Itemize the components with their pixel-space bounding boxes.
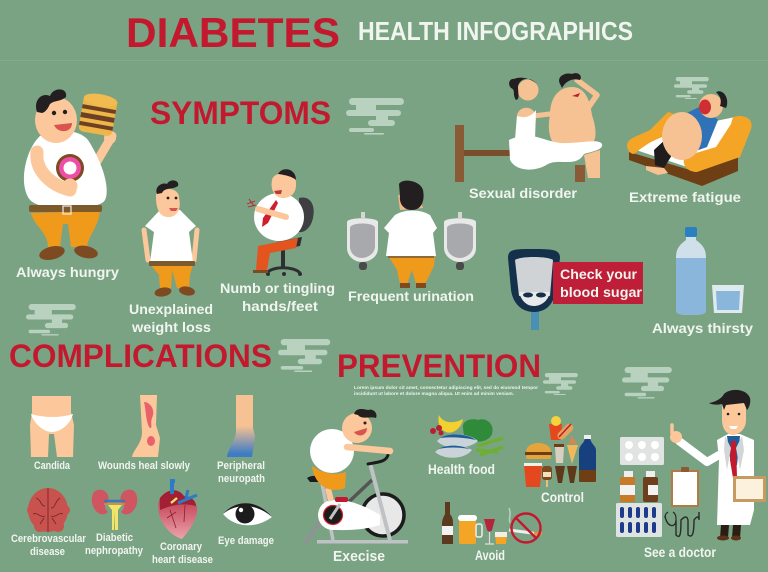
heading: symptoms: SYMPTOMS (150, 95, 331, 131)
panel: always hungry (16, 89, 119, 280)
item: coronary heart disease: Coronary (160, 541, 203, 553)
icon: water bottle and glass (676, 227, 744, 315)
title: DIABETES: DIABETES (126, 9, 340, 56)
label: numb or tingling hands/feet: hands/feet (242, 298, 318, 314)
label: always thirsty: Always thirsty (652, 320, 753, 336)
icon: fast food and drinks (524, 416, 596, 487)
label: extreme fatigue: Extreme fatigue (629, 189, 741, 205)
icon: alcohol and no smoking (442, 502, 542, 544)
label: unexplained weight loss (129, 301, 213, 335)
label: execise: Execise (333, 548, 385, 565)
panel: control (524, 416, 596, 505)
item: cerebrovascular disease (11, 488, 87, 558)
label: unexplained weight loss: Unexplained (129, 301, 213, 317)
decorative cloud: complications (278, 339, 330, 372)
callout: red box: Check your (560, 266, 638, 282)
lorem ipsum text block (354, 385, 538, 397)
item: coronary heart disease (152, 481, 213, 566)
panel: avoid (442, 502, 542, 563)
panel: always thirsty (652, 227, 753, 336)
item: eye damage (218, 503, 274, 547)
decorative cloud: doctor (622, 367, 672, 398)
icon: banana, greens, fish (430, 415, 503, 458)
icon: fat man with burger and donut (24, 89, 118, 262)
item: peripheral neuropath: Peripheral (217, 460, 265, 472)
decorative cloud: fatigue (674, 77, 709, 99)
item: cerebrovascular disease: Cerebrovascular (11, 533, 87, 545)
label: control: Control (541, 489, 584, 505)
item: eye damage: Eye damage (218, 535, 274, 547)
lorem ipsum text block: Lorem ipsum dolor sit amet, consectetur adipiscing elit, sed do eiusmod tempor (354, 385, 538, 391)
panel: see a doctor (616, 390, 766, 560)
icon: glucose meter (508, 249, 560, 330)
label: unexplained weight loss: weight loss (131, 319, 211, 335)
panel: frequent urination (347, 181, 476, 304)
label: health food: Health food (428, 461, 495, 477)
panel: health food (428, 415, 503, 477)
panel: unexplained weight loss (129, 180, 213, 335)
label: sexual disorder: Sexual disorder (469, 185, 578, 201)
lorem ipsum text block: incididunt ut labore et dolore magna aliqua. Ut enim ad minim veniam. (354, 391, 514, 397)
label: always hungry: Always hungry (16, 264, 119, 280)
icon: thin man holding loose pants (144, 180, 197, 298)
item: candida: Candida (34, 460, 71, 472)
label: avoid: Avoid (475, 547, 505, 563)
panel: sexual disorder (455, 73, 602, 201)
callout: red box: blood sugar (560, 284, 643, 300)
icon: seated man with tingling hands (247, 169, 314, 276)
item: wounds heal slowly (98, 395, 191, 472)
decorative cloud: left (26, 304, 76, 335)
decorative cloud: prevention (543, 373, 578, 395)
item: candida (30, 396, 74, 472)
label: numb or tingling hands/feet: Numb or tingling (220, 280, 335, 296)
subtitle: health infographics: HEALTH INFOGRAPHICS (358, 16, 633, 46)
item: peripheral neuropath (217, 395, 265, 485)
item: diabetic nephropathy: nephropathy (85, 545, 144, 557)
item: diabetic nephropathy: Diabetic (96, 532, 133, 544)
panel: extreme fatigue (627, 91, 752, 205)
panel: check your blood sugar (508, 249, 643, 330)
icon: couple on bed (455, 73, 602, 182)
icon: man on exercise bike (305, 409, 408, 544)
decorative cloud: symptoms (346, 98, 404, 135)
label: see a doctor: See a doctor (644, 544, 716, 560)
panel: exercise (305, 409, 408, 565)
icon: doctor with medicines (616, 390, 766, 540)
item: peripheral neuropath: neuropath (218, 473, 265, 485)
item: cerebrovascular disease: disease (30, 546, 65, 558)
label: numb or tingling hands/feet (220, 280, 335, 314)
heading: complications: COMPLICATIONS (9, 338, 272, 374)
icon: man slumped on sofa (627, 91, 752, 186)
panel: complications (11, 395, 274, 566)
icon: man between urinals, from behind (347, 181, 476, 288)
item: coronary heart disease: heart disease (152, 554, 213, 566)
item: wounds heal slowly: Wounds heal slowly (98, 460, 191, 472)
heading: prevention: PREVENTION (337, 348, 541, 384)
label: frequent urination: Frequent urination (348, 288, 474, 304)
item: diabetic nephropathy (85, 490, 144, 557)
panel: numb or tingling (220, 169, 335, 314)
callout: red box (553, 262, 643, 304)
